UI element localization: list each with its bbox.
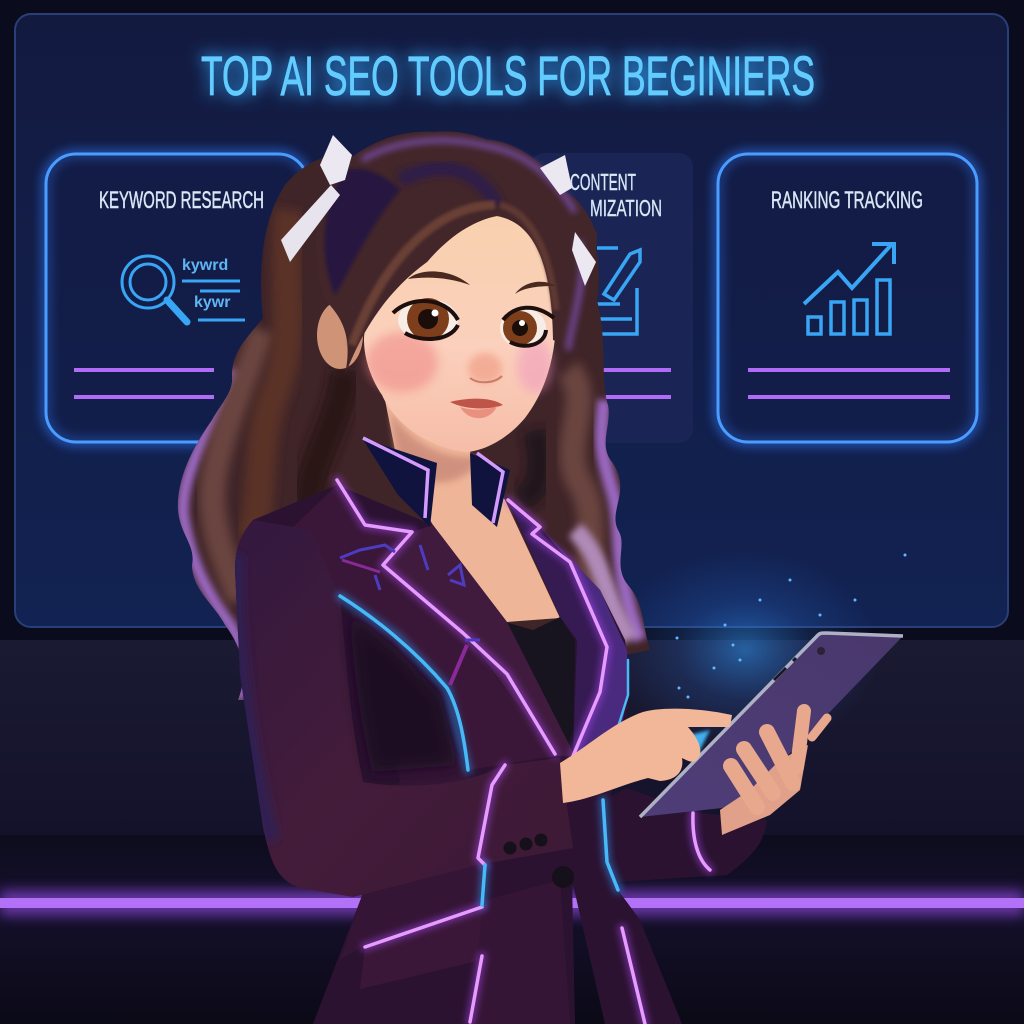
heading: content optimization: CONTENT <box>570 169 636 195</box>
right eye <box>500 308 554 348</box>
bows <box>281 135 596 286</box>
panel: ranking tracking <box>718 154 977 442</box>
tablet <box>640 633 903 817</box>
lower-body shading <box>340 610 570 1024</box>
left eye <box>393 298 458 341</box>
panel: content optimization <box>530 153 693 443</box>
neck and chest <box>385 400 560 622</box>
blush <box>366 332 438 392</box>
icon: magnifier with keywords <box>122 256 245 322</box>
panel: keyword research <box>46 154 308 442</box>
back hair <box>178 131 650 700</box>
pocket flap <box>360 907 482 989</box>
display board <box>15 14 1008 627</box>
purple lines <box>748 368 950 399</box>
icon: rising bar chart <box>804 244 894 334</box>
icon: document and pencil <box>590 248 640 334</box>
purple lines <box>600 368 671 399</box>
chest pattern <box>340 545 480 685</box>
black top <box>505 617 580 780</box>
hand holding tablet <box>720 711 827 835</box>
right lapel panel <box>508 500 607 756</box>
pointing hand <box>560 709 732 803</box>
front hair <box>316 131 597 375</box>
character <box>178 131 903 1024</box>
heading: ranking tracking: RANKING TRACKING <box>771 187 923 214</box>
hair strands <box>183 210 640 700</box>
right sleeve <box>603 788 767 882</box>
blazer buttons <box>504 834 574 888</box>
nose <box>468 353 502 383</box>
brown strands <box>352 205 495 345</box>
blazer body <box>235 485 682 1024</box>
tablet ports <box>774 658 796 680</box>
panel: content optimization: MIZATION <box>590 195 662 221</box>
sparkles from tablet <box>610 550 906 750</box>
blue collar <box>362 438 510 527</box>
purple lines <box>74 368 214 399</box>
purple rim <box>362 140 582 350</box>
neck shadow <box>390 410 480 483</box>
eyebrows <box>408 271 470 285</box>
ear <box>317 301 363 369</box>
icon: magnifier with keywords: kywrd <box>182 257 228 274</box>
blazer trim <box>337 480 710 1024</box>
mouth <box>450 399 503 418</box>
heading: keyword research: KEYWORD RESEARCH <box>99 187 264 214</box>
face <box>364 216 556 452</box>
left sleeve <box>235 520 573 897</box>
icon: magnifier with keywords: kywr <box>194 294 230 311</box>
dark purple side <box>325 169 400 295</box>
left lapel panel <box>383 525 575 756</box>
neon floor line <box>0 890 1024 916</box>
